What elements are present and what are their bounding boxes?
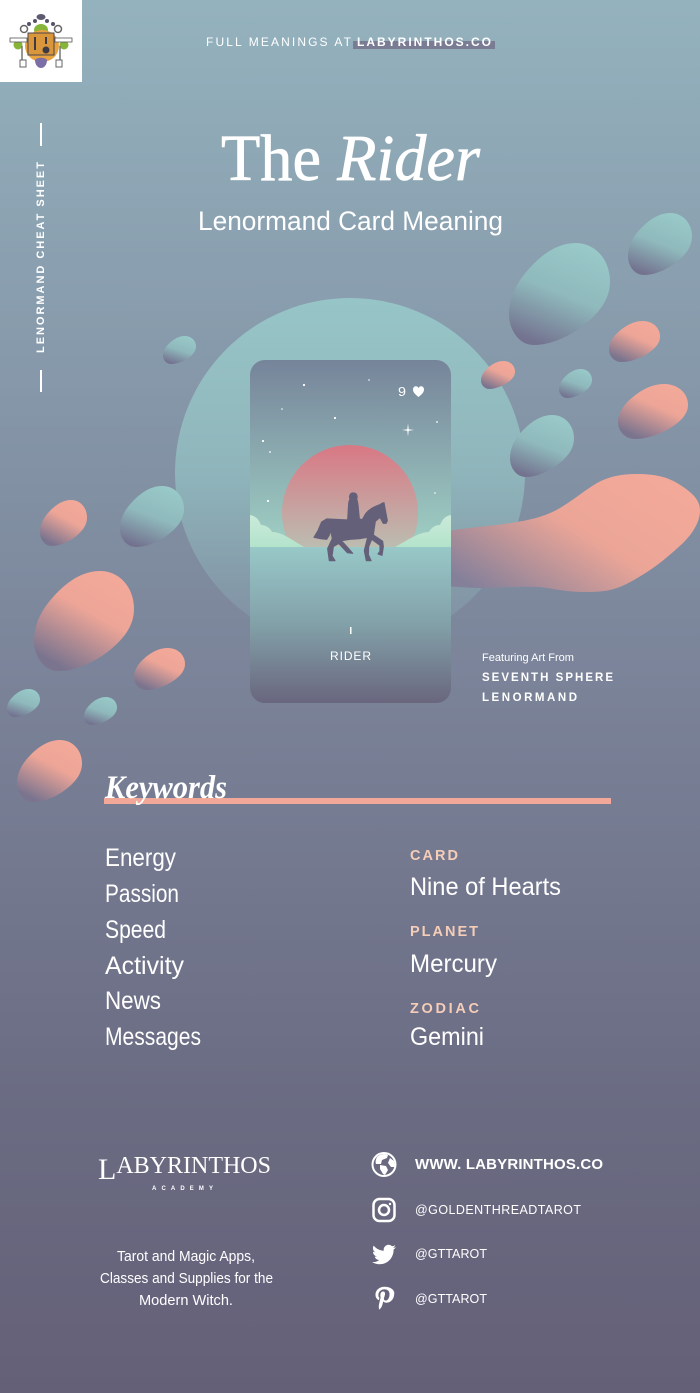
website link: WWW. LABYRINTHOS.CO — [415, 1156, 603, 1173]
icon: pinterest — [376, 1287, 394, 1309]
keywords list: Messages — [105, 1023, 201, 1051]
footer tagline: Classes and Supplies for the — [100, 1271, 273, 1287]
header link: FULL MEANINGS AT — [206, 35, 352, 49]
card attributes: Nine of Hearts — [410, 873, 561, 901]
card attributes: CARD — [410, 848, 458, 864]
footer tagline: Modern Witch. — [139, 1293, 233, 1309]
instagram handle: @GOLDENTHREADTAROT — [415, 1203, 581, 1217]
card — [250, 360, 451, 703]
keywords heading: Keywords — [104, 770, 227, 806]
keywords list — [105, 844, 201, 1051]
icon: twitter — [372, 1245, 396, 1264]
card sky — [250, 360, 451, 548]
card numeral — [350, 627, 352, 634]
art credit — [482, 652, 613, 704]
subtitle: Lenormand Card Meaning — [198, 206, 503, 236]
card attributes: Mercury — [410, 950, 497, 978]
footer logo: ABYRINTHOS — [116, 1153, 271, 1179]
card attributes: Gemini — [410, 1023, 484, 1051]
footer logo: ACADEMY — [152, 1186, 213, 1192]
logo tile — [0, 0, 82, 82]
rider silhouette — [314, 493, 387, 561]
footer logo: L — [98, 1153, 116, 1186]
card sun — [282, 445, 418, 547]
footer tagline — [100, 1249, 273, 1309]
large background circle — [175, 298, 525, 648]
header link — [206, 35, 495, 49]
art credit: SEVENTH SPHERE — [482, 672, 613, 684]
card name: RIDER — [330, 649, 371, 663]
title: The Rider — [221, 122, 480, 195]
art credit: Featuring Art From — [482, 652, 574, 664]
footer tagline: Tarot and Magic Apps, — [117, 1249, 255, 1265]
keywords list: Passion — [105, 880, 179, 908]
vertical label: LENORMAND CHEAT SHEET — [35, 162, 47, 353]
keywords list: Speed — [105, 916, 166, 944]
card sea — [250, 547, 451, 703]
card attributes — [410, 848, 561, 1051]
art credit: LENORMAND — [482, 692, 577, 704]
icon: instagram — [374, 1199, 394, 1221]
keywords list: Activity — [105, 952, 184, 980]
card number and suit: 9 — [398, 384, 406, 399]
icon: globe — [372, 1153, 396, 1176]
card attributes: PLANET — [410, 924, 478, 940]
keywords heading — [104, 770, 611, 806]
pinterest handle: @GTTAROT — [415, 1292, 487, 1306]
card number and suit — [398, 384, 424, 399]
keywords list: Energy — [105, 844, 176, 872]
card stars — [262, 379, 438, 502]
twitter handle: @GTTAROT — [415, 1247, 487, 1261]
footer logo — [98, 1153, 271, 1192]
header link: LABYRINTHOS.CO — [357, 35, 491, 49]
blobs: floating shapes — [7, 213, 700, 802]
keywords list: News — [105, 987, 161, 1015]
card clouds — [250, 515, 451, 547]
card attributes: ZODIAC — [410, 1001, 480, 1017]
